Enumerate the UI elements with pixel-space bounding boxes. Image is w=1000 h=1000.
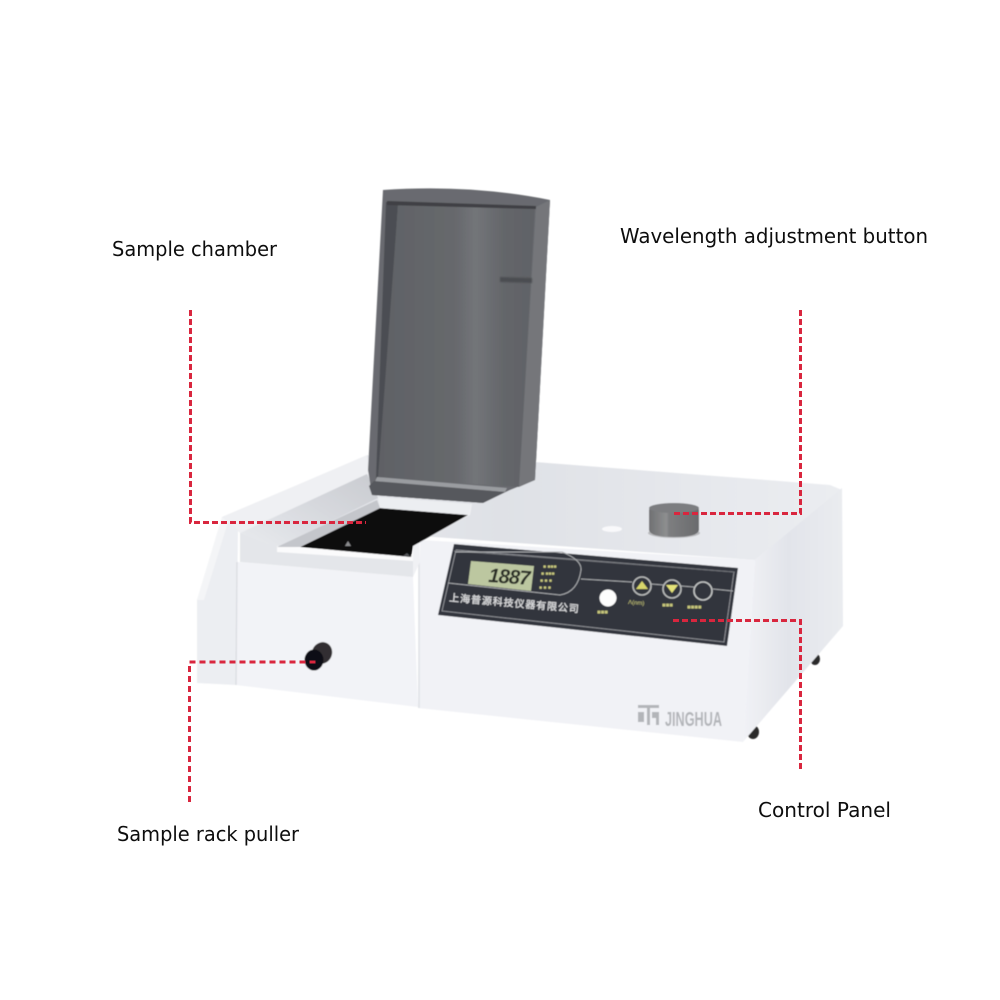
lid [368, 188, 550, 503]
label: sample chamber: Sample chamber [112, 237, 278, 261]
indicator lights [539, 564, 556, 591]
up button [633, 577, 651, 595]
LCD display [468, 561, 534, 591]
sample chamber opening [300, 508, 468, 557]
indicator lights: ■ ■ ■ [540, 578, 552, 584]
drawer top lip [240, 533, 413, 577]
company name: 上海普源科技仪器有限公司 [449, 591, 579, 615]
right side [743, 488, 843, 742]
label: sample rack puller: Sample rack puller [117, 822, 300, 846]
body top surface [222, 455, 842, 560]
leader: control panel [672, 620, 800, 769]
brand logo [638, 705, 722, 731]
brand logo: JINGHUA [665, 709, 722, 731]
control panel [438, 544, 738, 646]
label: wavelength adjustment button: Wavelength adjustment button [620, 224, 928, 248]
label: control panel: Control Panel [758, 798, 891, 822]
chamber details [345, 541, 351, 546]
puller knob [304, 639, 336, 670]
drawer front [236, 562, 418, 707]
left flank [197, 517, 238, 685]
panel button labels [597, 600, 702, 616]
down button [663, 580, 681, 598]
white oval on top [602, 526, 622, 532]
indicator lights: ■ ■■■ [543, 564, 556, 570]
blank button [694, 582, 712, 600]
wavelength knob [648, 503, 700, 538]
LCD display: 1887 [488, 565, 532, 590]
round white button [600, 590, 616, 606]
leader: sample chamber [190, 310, 366, 522]
leader: wavelength adjustment button [672, 310, 800, 514]
indicator lights: ■ ■ ■ [539, 585, 551, 591]
chamber left rim [277, 500, 380, 547]
panel button labels: ■■■ [597, 610, 608, 616]
feet [747, 653, 820, 739]
panel button labels: ■■■■ [687, 605, 702, 611]
leader: sample rack puller [190, 662, 316, 802]
panel button labels: Λ(nm) [628, 600, 645, 607]
left raised top strip [223, 455, 370, 533]
front panel [418, 540, 755, 742]
indicator lights: ■ ■■■ [541, 571, 554, 577]
instrument: spectrophotometer [197, 188, 843, 742]
panel button labels: ■■■ [662, 603, 673, 609]
